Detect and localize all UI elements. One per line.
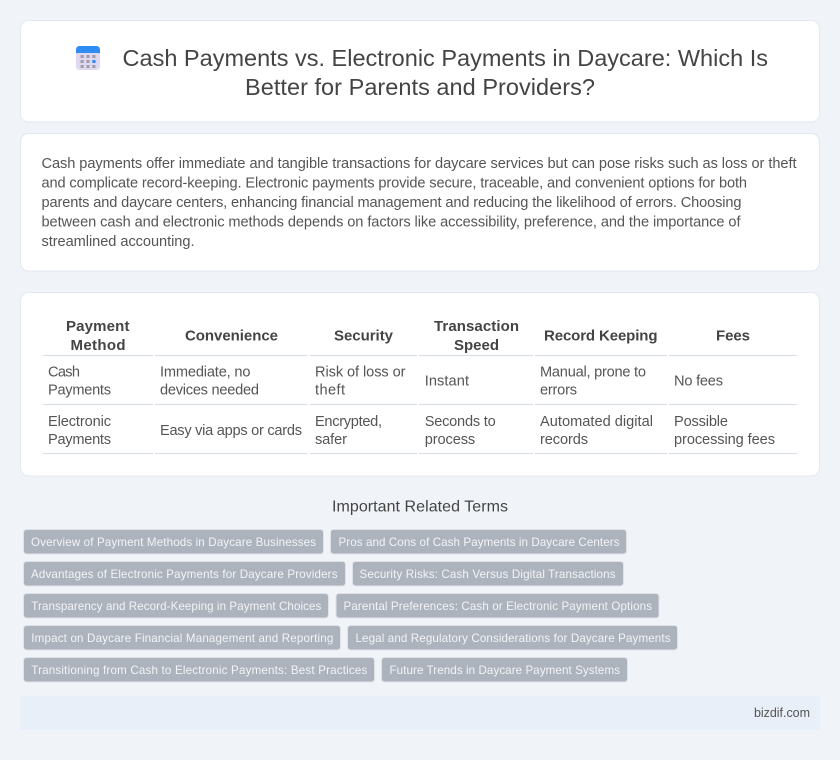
panel: summary text: streamlined accounting. bbox=[42, 234, 194, 250]
table row: cash payments: errors bbox=[540, 382, 577, 398]
table row: cash payments: Manual, prone to bbox=[540, 364, 646, 380]
table row: cash payments: Risk of loss or bbox=[315, 364, 406, 380]
panel: title card bbox=[20, 20, 820, 122]
table row: electronic payments: Possible bbox=[674, 414, 728, 430]
table header: Transaction bbox=[434, 318, 519, 335]
table row: electronic payments: Easy via apps or cards bbox=[160, 423, 302, 439]
table header: Record Keeping bbox=[544, 328, 658, 344]
table header: Method bbox=[70, 337, 126, 354]
table header bbox=[66, 318, 750, 354]
panel: comparison table bbox=[20, 292, 820, 476]
title: Better for Parents and Providers? bbox=[245, 74, 595, 100]
panel: related term tags: Transitioning from Cash to Electronic Payments: Best Practices bbox=[31, 664, 368, 677]
table header: Convenience bbox=[185, 328, 278, 344]
panel: related term tags: Future Trends in Daycare Payment Systems bbox=[390, 664, 620, 677]
table row: electronic payments: records bbox=[540, 432, 588, 448]
panel: related term tags: Overview of Payment Methods in Daycare Businesses bbox=[31, 536, 316, 549]
icon: calendar bbox=[76, 46, 100, 70]
table header: Payment bbox=[66, 318, 130, 335]
table row: electronic payments: Automated digital bbox=[540, 414, 653, 430]
heading: important related terms: Important Related Terms bbox=[332, 498, 508, 516]
table row: cash payments: Immediate, no bbox=[160, 364, 250, 380]
table row: electronic payments: Electronic bbox=[48, 414, 111, 430]
panel: related term tags: Transparency and Record-Keeping in Payment Choices bbox=[31, 600, 322, 613]
panel: related term tags: Impact on Daycare Financial Management and Reporting bbox=[31, 632, 333, 645]
panel: summary text: and complicate record-keeping. Electronic payments provide secure, traceable, and convenient options for both bbox=[42, 176, 747, 192]
table row: cash payments: devices needed bbox=[160, 382, 259, 398]
panel: related term tags: Security Risks: Cash Versus Digital Transactions bbox=[360, 568, 616, 581]
panel: summary text: between cash and electronic methods depends on factors like accessibility, preference, and the importance of bbox=[42, 214, 741, 230]
panel: summary text: Cash payments offer immediate and tangible transactions for daycare services but can pose risks such as loss or theft bbox=[42, 156, 796, 172]
table row: cash payments: Payments bbox=[48, 382, 111, 398]
table header: Security bbox=[334, 328, 394, 344]
table row: cash payments: Instant bbox=[425, 374, 469, 390]
table row: electronic payments: Payments bbox=[48, 432, 111, 448]
table header: Speed bbox=[454, 337, 499, 354]
table row: electronic payments: Encrypted, bbox=[315, 414, 382, 430]
panel: related term tags: Advantages of Electronic Payments for Daycare Providers bbox=[31, 568, 338, 581]
panel: summary text bbox=[20, 134, 820, 271]
panel: related term tags bbox=[24, 530, 678, 682]
footer: bizdif.com bbox=[754, 706, 810, 720]
panel: summary text: parents and daycare centers, enhancing financial management and reducing the likelihood of errors. Choosing bbox=[42, 195, 742, 211]
table row: electronic payments: processing fees bbox=[674, 432, 775, 448]
table row: cash payments: theft bbox=[315, 382, 345, 398]
table row: cash payments bbox=[48, 364, 723, 398]
panel: related term tags: Legal and Regulatory Considerations for Daycare Payments bbox=[356, 632, 671, 645]
table row: electronic payments: safer bbox=[315, 432, 347, 448]
table row: electronic payments: Seconds to bbox=[425, 414, 496, 430]
panel: related term tags: Pros and Cons of Cash Payments in Daycare Centers bbox=[338, 536, 620, 549]
table header: Fees bbox=[716, 328, 750, 344]
panel: related term tags: Parental Preferences: Cash or Electronic Payment Options bbox=[344, 600, 652, 613]
title: Cash Payments vs. Electronic Payments in Daycare: Which Is bbox=[122, 45, 768, 71]
title bbox=[122, 45, 768, 100]
table row: cash payments: No fees bbox=[674, 374, 723, 390]
table row: cash payments: Cash bbox=[48, 364, 80, 380]
table row: electronic payments bbox=[48, 414, 775, 448]
table row: electronic payments: process bbox=[425, 432, 475, 448]
footer bbox=[20, 696, 820, 730]
